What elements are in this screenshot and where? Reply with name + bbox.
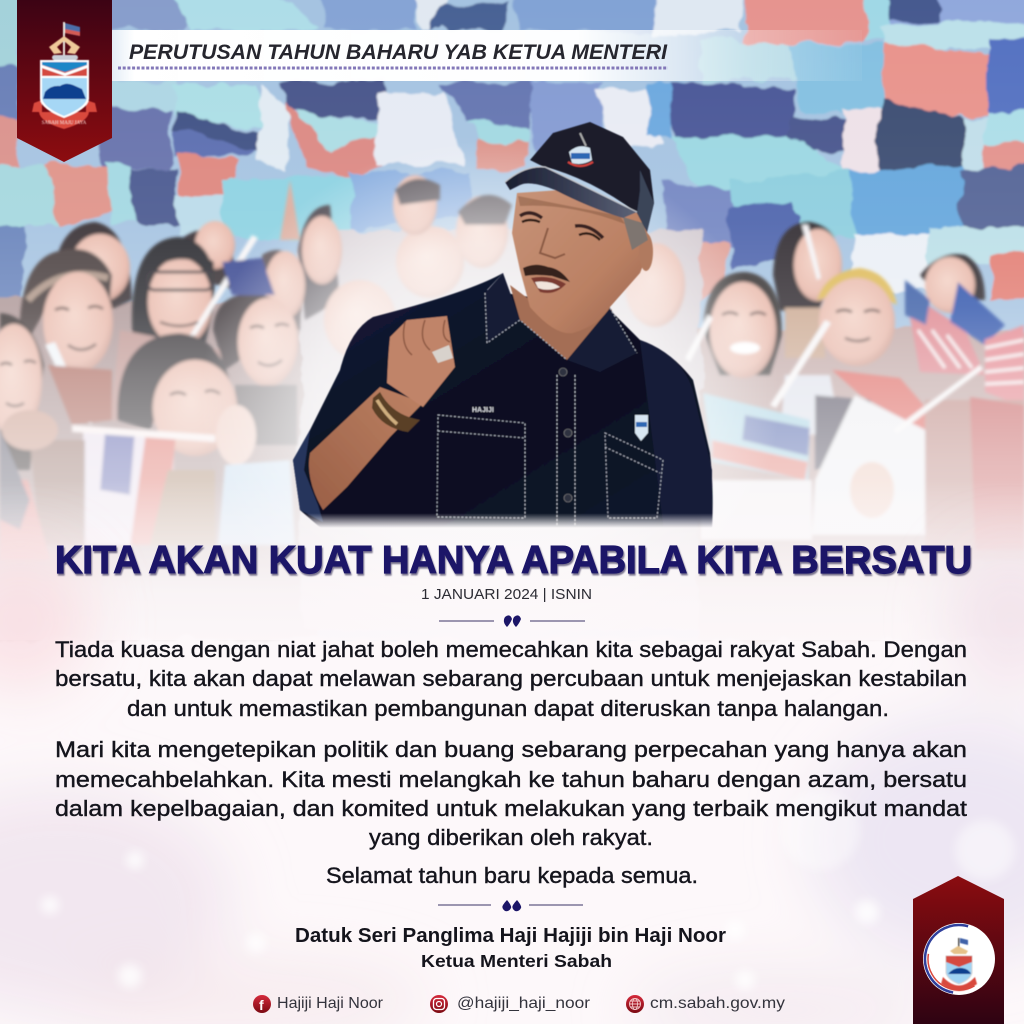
- divider with quote mark: [439, 615, 585, 627]
- social: facebook: Hajiji Haji Noor: [277, 995, 384, 1012]
- divider with closing quote mark: [438, 900, 583, 911]
- message body paragraph two: memecahbelahkan. Kita mesti melangkah ke tahun baharu dengan azam, bersatu: [55, 767, 967, 792]
- date line: 1 JANUARI 2024 | ISNIN: [421, 586, 592, 603]
- flag patches: [0, 0, 1024, 640]
- social: facebook: f: [259, 997, 264, 1013]
- message body paragraph two: dalam kepelbagaian, dan komited untuk melakukan yang terbaik mengikut mandat: [55, 796, 968, 821]
- message body paragraph two: [55, 737, 968, 850]
- headline: KITA AKAN KUAT HANYA APABILA KITA BERSATU: [55, 539, 972, 582]
- header ribbon: [112, 30, 862, 81]
- social: website: cm.sabah.gov.my: [650, 995, 785, 1012]
- social: instagram: @hajiji_haji_noor: [457, 995, 591, 1012]
- soft tints on lower backdrop: [0, 550, 1024, 1024]
- panel: portrait of the Chief Minister: HAJIJI: [472, 407, 494, 414]
- banner: campaign seal bottom right: [913, 876, 1004, 1024]
- message body paragraph two: Mari kita mengetepikan politik dan buang sebarang perpecahan yang hanya akan: [55, 737, 967, 762]
- lower pale backdrop: [0, 480, 1024, 1024]
- right crowd: [685, 222, 1024, 560]
- seal crest: [941, 938, 977, 991]
- message body paragraph one: dan untuk memastikan pembangunan dapat diteruskan tanpa halangan.: [127, 696, 889, 721]
- message body paragraph one: Tiada kuasa dengan niat jahat boleh memecahkan kita sebagai rakyat Sabah. Dengan: [55, 637, 967, 662]
- signatory title: Ketua Menteri Sabah: [421, 951, 612, 971]
- header title: PERUTUSAN TAHUN BAHARU YAB KETUA MENTERI: [129, 40, 668, 64]
- white fade overlay: [0, 0, 1024, 640]
- centre crowd behind portrait: [280, 175, 685, 360]
- message body paragraph one: bersatu, kita akan dapat melawan sebarang percubaan untuk menjejaskan kestabilan: [55, 666, 967, 691]
- crest artwork: [32, 22, 97, 129]
- banner: state crest top left: [17, 0, 112, 162]
- bokeh lights: [41, 790, 1015, 990]
- left crowd: [0, 205, 342, 560]
- left crowd facial features: [0, 306, 289, 406]
- centre glow behind portrait: [200, 140, 780, 660]
- panel: portrait of the Chief Minister: [293, 122, 713, 530]
- signatory name: Datuk Seri Panglima Haji Hajiji bin Haji Noor: [295, 925, 726, 947]
- right crowd facial features: [722, 310, 880, 341]
- message body paragraph two: yang diberikan oleh rakyat.: [369, 825, 653, 850]
- crowd faces and flags: [0, 175, 1024, 560]
- crest artwork: SABAH MAJU JAYA: [42, 121, 87, 126]
- message body paragraph one: [55, 637, 967, 721]
- closing greeting: Selamat tahun baru kepada semua.: [326, 863, 698, 888]
